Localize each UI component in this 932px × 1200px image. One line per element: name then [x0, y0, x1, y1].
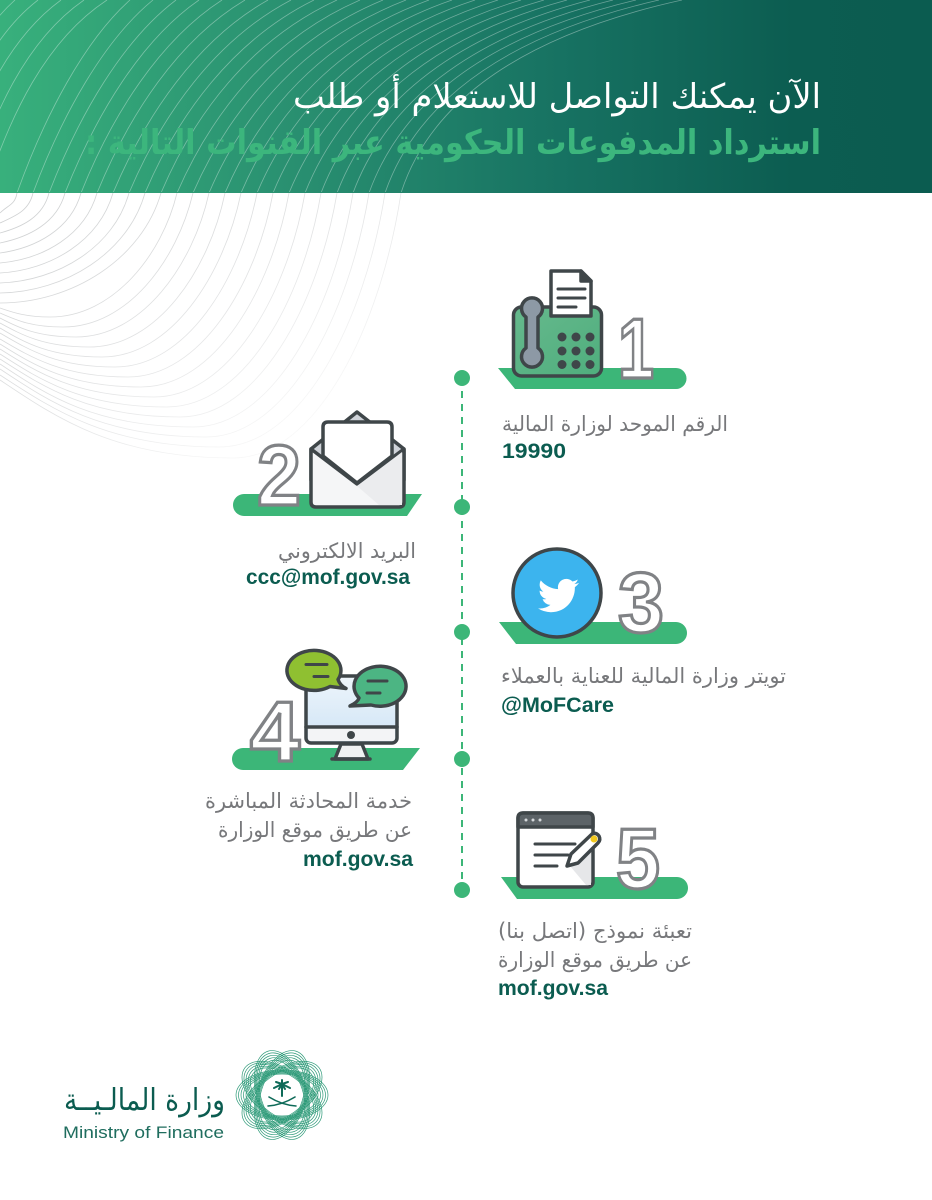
channel 5: contact form [498, 812, 692, 1000]
number 3: 3 [618, 556, 664, 651]
channel 1: phone number [498, 271, 728, 463]
logo English name: Ministry of Finance [63, 1123, 224, 1142]
value 5: mof.gov.sa [498, 977, 608, 1000]
logo Arabic name: وزارة المالـيــة [64, 1083, 225, 1118]
number 5: 5 [616, 812, 660, 907]
number 2: 2 [257, 429, 301, 524]
label 5 line 2: عن طريق موقع الوزارة [498, 948, 692, 972]
icon: twitter bird [513, 549, 601, 637]
number 4: 4 [250, 685, 300, 780]
channel 3: twitter [499, 549, 786, 717]
label 4 line 2: عن طريق موقع الوزارة [218, 818, 412, 842]
timeline [454, 370, 470, 898]
logo: Ministry of Finance [63, 1044, 334, 1146]
title line 2: استرداد المدفوعات الحكومية عبر القنوات التالية : [85, 123, 821, 163]
ground bar 3 [499, 622, 687, 644]
logo emblem rosette [230, 1044, 334, 1146]
icon: envelope [311, 412, 404, 507]
value 3: @MoFCare [501, 694, 614, 717]
ground bar 4 [232, 748, 420, 770]
label 5 line 1: تعبئة نموذج (اتصل بنا) [498, 919, 692, 944]
ground bar 5 [501, 877, 688, 899]
label 1: الرقم الموحد لوزارة المالية [502, 412, 728, 437]
ground bar 2 [233, 494, 422, 516]
icon: fax machine [514, 271, 602, 376]
channel 4: live chat [205, 650, 420, 871]
decorative wave lines on white background [0, 193, 401, 458]
number 1: 1 [618, 302, 654, 397]
channel 2: email [233, 412, 422, 589]
label 3: تويتر وزارة المالية للعناية بالعملاء [501, 664, 786, 688]
label 4 line 1: خدمة المحادثة المباشرة [205, 789, 412, 813]
value 2: ccc@mof.gov.sa [246, 566, 410, 589]
header banner [0, 0, 932, 193]
icon: monitor with chat bubbles [287, 650, 406, 759]
value 1: 19990 [502, 440, 566, 463]
label 2: البريد الالكتروني [278, 539, 416, 563]
icon: web form with pencil [518, 813, 600, 887]
ground bar 1 [498, 368, 686, 389]
title line 1: الآن يمكنك التواصل للاستعلام أو طلب [293, 74, 821, 117]
value 4: mof.gov.sa [303, 848, 413, 871]
